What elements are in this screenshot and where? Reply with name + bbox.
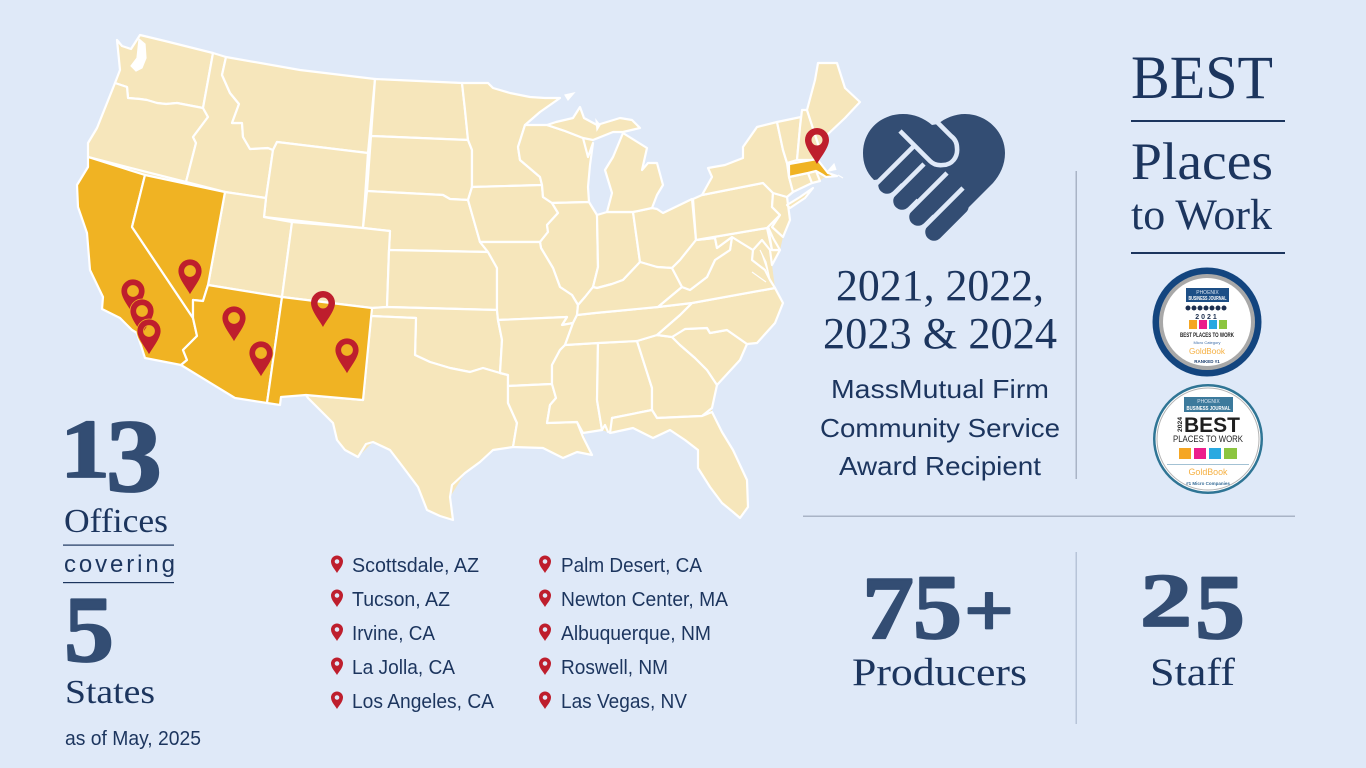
- Arizona: [181, 285, 282, 403]
- office locations list: column 2: Newton Center, MA: [561, 589, 729, 611]
- stat: 13 offices covering 5 states: [60, 399, 201, 750]
- office locations list: column 1: Irvine, CA: [352, 623, 436, 645]
- badge: 2021 best places to work: BUSINESS JOURNAL: [1188, 296, 1226, 302]
- best places to work heading: Places: [1131, 133, 1273, 191]
- badge: 2024 best places to work: BEST: [1184, 414, 1240, 437]
- stat: 13 offices covering 5 states: as of May, 2025: [65, 728, 201, 750]
- stat: 13 offices covering 5 states: covering: [64, 551, 175, 578]
- award years heading: 2023 & 2024: [823, 309, 1057, 358]
- badge: 2024 best places to work: PHOENIX: [1197, 399, 1220, 405]
- states: unhighlighted: [88, 35, 860, 520]
- stat: 75+ producers: +: [964, 569, 1014, 653]
- badge: 2024 best places to work: GoldBook: [1188, 467, 1228, 477]
- stat: 75+ producers: 7: [862, 559, 914, 658]
- divider: stats: [803, 516, 1295, 517]
- office locations list: column 2: [539, 555, 729, 713]
- stat: 13 offices covering 5 states: States: [65, 674, 155, 711]
- badge: 2021 best places to work: 2021: [1195, 314, 1219, 321]
- stat: 25 staff: Staff: [1150, 651, 1235, 694]
- award description: Community Service: [820, 413, 1060, 443]
- highlighted states with offices: [77, 157, 837, 405]
- badge: 2021 best places to work: BEST PLACES TO WORK: [1180, 332, 1234, 339]
- award description: MassMutual Firm: [831, 374, 1049, 404]
- badge: 2021 best places to work: GoldBook: [1189, 346, 1226, 356]
- divider: producers and staff: [1076, 552, 1077, 724]
- inland water and island details: [131, 39, 843, 282]
- best places to work heading: to Work: [1131, 192, 1273, 239]
- office locations list: column 2: Albuquerque, NM: [561, 623, 711, 645]
- stat: 13 offices covering 5 states: 1: [60, 403, 110, 496]
- stat: 25 staff: 2: [1140, 559, 1192, 643]
- stat: 13 offices covering 5 states: 5: [64, 578, 114, 682]
- badge: 2024 best places to work: BUSINESS JOURNAL: [1186, 406, 1231, 412]
- stat: 75+ producers: [852, 556, 1027, 694]
- stat: 75+ producers: 5: [913, 556, 962, 658]
- badge: 2021 best places to work: PHOENIX: [1196, 290, 1219, 296]
- badge: 2024 best places to work: PLACES TO WORK: [1173, 434, 1243, 444]
- office pins on the map: [121, 128, 829, 377]
- badge: 2024 best places to work: 2024: [1177, 417, 1184, 432]
- award years heading: [823, 261, 1057, 358]
- badge: 2021 best places to work: RANKED #1: [1194, 359, 1220, 364]
- office locations list: column 1: [331, 555, 495, 713]
- office locations list: column 1: Scottsdale, AZ: [352, 555, 479, 577]
- award years heading: 2021, 2022,: [836, 261, 1044, 310]
- best places to work heading: BEST: [1131, 45, 1273, 112]
- office locations list: column 2: Las Vegas, NV: [561, 691, 688, 713]
- best places to work heading: [1131, 45, 1285, 254]
- award description: [820, 374, 1060, 481]
- stat: 13 offices covering 5 states: Offices: [64, 503, 168, 540]
- badge: 2024 best places to work: [1153, 384, 1263, 494]
- US map: [77, 35, 860, 520]
- office locations list: column 1: Tucson, AZ: [352, 589, 450, 611]
- office locations list: column 2: Roswell, NM: [561, 657, 668, 679]
- stat: 25 staff: 5: [1195, 556, 1245, 658]
- Nevada: [132, 175, 225, 318]
- icon: heart of clasped hands: [863, 114, 1005, 232]
- stat: 13 offices covering 5 states: 3: [106, 399, 162, 514]
- badge: 2021 best places to work: Micro Category: [1193, 340, 1221, 345]
- office locations list: column 1: La Jolla, CA: [352, 657, 456, 679]
- stat: 25 staff: [1140, 556, 1245, 694]
- office locations list: column 2: Palm Desert, CA: [561, 555, 703, 577]
- California: [77, 157, 197, 365]
- badge: 2021 best places to work: [1152, 268, 1262, 376]
- badge: 2024 best places to work: #1 Micro Companies: [1186, 481, 1230, 486]
- New Mexico: [267, 297, 372, 405]
- office locations list: column 1: Los Angeles, CA: [352, 691, 495, 713]
- divider: award column: [1076, 171, 1077, 479]
- stat: 75+ producers: Producers: [852, 651, 1027, 694]
- award description: Award Recipient: [839, 451, 1042, 481]
- map silhouette underlay: [77, 35, 860, 520]
- Massachusetts: [789, 159, 837, 177]
